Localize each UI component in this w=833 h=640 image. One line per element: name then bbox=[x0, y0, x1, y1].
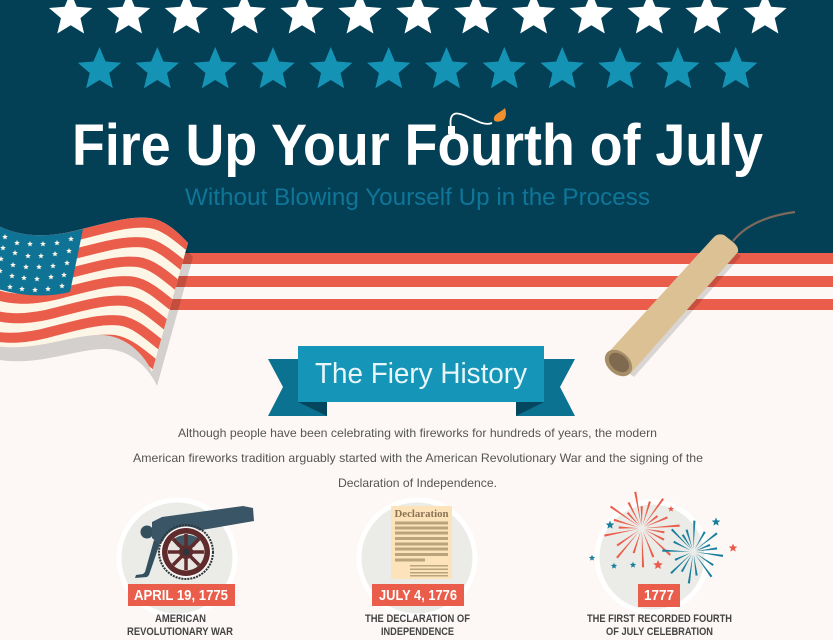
ribbon: The Fiery History bbox=[268, 346, 575, 416]
tube bbox=[606, 234, 738, 373]
blue star row bbox=[78, 47, 757, 88]
icon circle bbox=[119, 500, 235, 616]
flag shadow bbox=[0, 232, 193, 386]
flag stripes bbox=[0, 218, 188, 372]
firecracker bbox=[600, 212, 795, 382]
icon circle bbox=[597, 502, 707, 612]
icon: cannon bbox=[135, 506, 254, 579]
timeline item: April 19, 1775: APRIL 19, 1775 bbox=[134, 587, 228, 604]
intro paragraph bbox=[133, 426, 703, 490]
icon: red firework bbox=[604, 492, 680, 567]
title: Fire Up Your Fourth of July bbox=[72, 113, 763, 178]
timeline item: 1777: OF JULY CELEBRATION bbox=[606, 626, 713, 638]
canton stars bbox=[0, 234, 74, 292]
intro paragraph: Although people have been celebrating with fireworks for hundreds of years, the modern bbox=[178, 426, 657, 440]
timeline item: April 19, 1775 bbox=[119, 500, 254, 638]
icon: bomb fuse on title bbox=[448, 108, 506, 134]
fuse bbox=[733, 212, 795, 241]
flag bbox=[0, 218, 193, 386]
icon: declaration document: Declaration bbox=[394, 509, 449, 520]
tube opening bbox=[600, 344, 637, 382]
timeline item: July 4, 1776 bbox=[359, 500, 475, 638]
header band bbox=[0, 0, 833, 253]
icon: scattered stars bbox=[589, 506, 737, 569]
intro paragraph: American fireworks tradition arguably started with the American Revolutionary War and the signing of the bbox=[133, 451, 703, 465]
caption: THE FIRST RECORDED FOURTH bbox=[587, 613, 732, 625]
timeline item: July 4, 1776: INDEPENDENCE bbox=[381, 626, 454, 638]
white star row bbox=[49, 0, 787, 33]
caption: AMERICAN bbox=[155, 613, 206, 625]
date badge bbox=[638, 584, 680, 607]
subtitle: Without Blowing Yourself Up in the Process bbox=[185, 184, 650, 211]
caption: THE DECLARATION OF bbox=[365, 613, 470, 625]
ribbon: The Fiery History: The Fiery History bbox=[315, 358, 527, 390]
date badge bbox=[128, 584, 235, 606]
timeline item: July 4, 1776: JULY 4, 1776 bbox=[379, 587, 457, 604]
date badge bbox=[372, 584, 464, 606]
icon circle bbox=[359, 500, 475, 616]
flag canton bbox=[0, 224, 83, 295]
stripes band bbox=[170, 253, 833, 310]
timeline item: 1777: 1777 bbox=[644, 587, 674, 604]
intro paragraph: Declaration of Independence. bbox=[338, 476, 497, 490]
icon: teal firework bbox=[662, 521, 723, 584]
timeline item: April 19, 1775: REVOLUTIONARY WAR bbox=[127, 626, 233, 638]
firecracker shadow bbox=[609, 241, 741, 377]
timeline item: 1777 bbox=[587, 492, 737, 638]
